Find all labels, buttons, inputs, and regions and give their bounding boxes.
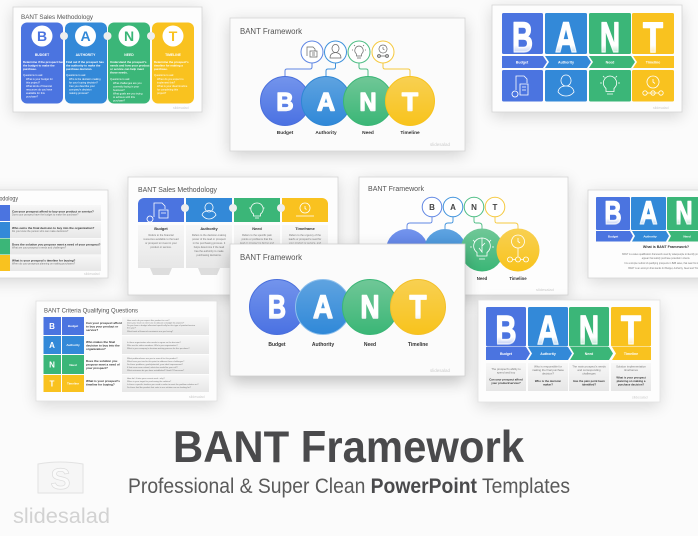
slide: BANT Sales Methodology icon columns: Timeframe <box>295 226 316 231</box>
slide: methodology question rows (cropped at left): Does your prospect have the budget to make the purchase? <box>12 214 79 216</box>
slide: BANT tiles with question cards: your product/service? <box>491 381 521 385</box>
slide: BANT Framework front slide: B <box>268 289 286 325</box>
slide: BANT Sales Methodology columns: slidesalad <box>173 106 189 110</box>
slide: BANT Sales Methodology icon columns: helps determine if the lead <box>194 245 225 249</box>
slide: BANT Framework front slide: Timeline <box>408 342 428 348</box>
slide: BANT Framework front slide: A <box>313 289 333 325</box>
slide: BANT Sales Methodology columns: project? <box>157 91 167 95</box>
slide: BANT Sales Methodology icon columns: Refers to the urgency of the <box>289 233 322 237</box>
slide: BANT Framework letter circles: T <box>493 203 498 212</box>
slide: BANT Sales Methodology columns: Determine if the prospect has <box>23 60 64 64</box>
slide: BANT Sales Methodology icon columns: Refers to the financial <box>148 233 174 237</box>
slide: BANT Criteria Qualifying Questions: How do I fit into your current work - why? <box>127 377 165 380</box>
slide: BANT Sales Methodology columns: business? <box>113 88 125 92</box>
slide: BANT tiles with icons: Timeline <box>646 60 660 64</box>
slide: BANT Framework front slide: T <box>410 289 427 325</box>
slide: BANT Sales Methodology icon columns: Refers to the specific pain <box>242 233 272 237</box>
slide: BANT tiles with icons <box>492 5 682 116</box>
slide: What is BANT Framework (cropped at right): Budget <box>608 234 618 238</box>
slide: BANT Framework letter circles: N <box>471 203 477 212</box>
slide: methodology question rows (cropped at left): Who owns the final decision to buy into the organization? <box>12 226 94 230</box>
slide: BANT Sales Methodology columns: NEED <box>124 53 134 57</box>
slide: BANT Framework with icon circles <box>230 18 465 155</box>
slide: BANT Sales Methodology columns: What is your ideal timeline <box>157 84 188 88</box>
slide: BANT Sales Methodology columns: resources do you have <box>26 88 53 92</box>
slide: BANT Framework letter circles <box>359 177 568 299</box>
slide: BANT Sales Methodology columns: currently facing in your <box>113 84 139 88</box>
slide: BANT Sales Methodology columns: Questions to ask: <box>66 73 86 77</box>
slide: BANT Sales Methodology columns: making process? <box>69 91 89 95</box>
slide: BANT Criteria Qualifying Questions: service? <box>86 328 98 332</box>
slide: BANT Criteria Qualifying Questions: Do you have a budget allocated specifically for this type of product/service <box>127 324 196 327</box>
slide: BANT tiles with question cards: spend and buy <box>497 370 516 374</box>
slide: BANT tiles with question cards: T <box>621 307 641 353</box>
slide: BANT Sales Methodology icon columns: power of the lead or prospect <box>192 237 226 241</box>
slide: BANT Framework front slide: slidesalad <box>430 368 451 373</box>
slide: BANT Sales Methodology columns: purchase decision. <box>66 67 92 71</box>
slide: BANT Criteria Qualifying Questions: slidesalad <box>189 395 205 399</box>
slide: BANT Criteria Qualifying Questions: BANT Criteria Qualifying Questions <box>44 308 138 314</box>
slide: BANT Criteria Qualifying Questions: In these organization who needs to agree on the decision? <box>127 341 182 344</box>
slide: BANT Sales Methodology columns: B <box>37 28 47 44</box>
slide: BANT tiles with question cards: maker? <box>543 382 553 386</box>
slide: BANT Criteria Qualifying Questions: Does your team or client use to allocate a budget for projects? <box>127 322 185 324</box>
slide: BANT Sales Methodology icon columns: lead's or prospect's need for <box>289 237 321 241</box>
slide: BANT tiles with question cards: Budget <box>500 352 513 356</box>
slide: BANT Criteria Qualifying Questions: What is your prospect's <box>86 379 120 383</box>
slide: BANT tiles with question cards <box>478 300 660 406</box>
slide: BANT Sales Methodology icon columns: points or problems that the <box>242 237 273 241</box>
slide: BANT Sales Methodology icon columns: Budget <box>154 226 168 231</box>
slide: BANT Criteria Qualifying Questions: Need <box>69 363 77 367</box>
slide: BANT Framework with icon circles: A <box>317 88 335 116</box>
slide: BANT Sales Methodology columns: needs and how your product <box>110 64 150 68</box>
slide: BANT Sales Methodology columns: Find out if the prospect has <box>66 60 104 64</box>
slide: BANT Sales Methodology columns: for completing this <box>157 88 179 92</box>
slide: What is BANT Framework (cropped at right): B <box>604 195 622 231</box>
slide: BANT Framework with icon circles: Need <box>362 130 374 136</box>
slide: BANT Criteria Qualifying Questions: Do these problems, goals/potential, your ideal improvement? <box>127 363 184 366</box>
slide: BANT tiles with question cards: The main prospect's needs <box>572 364 606 368</box>
slide: BANT tiles with icons: Budget <box>516 60 529 64</box>
slide: BANT Sales Methodology icon columns: Need <box>252 226 262 231</box>
slide: BANT Sales Methodology columns: Questions to ask: <box>110 77 130 81</box>
slide: BANT Sales Methodology columns: Questions to ask: <box>154 73 174 77</box>
slide: BANT Criteria Qualifying Questions: N <box>49 360 55 370</box>
slide: BANT Sales Methodology icon columns: resources available to the lead <box>143 237 179 241</box>
slide: BANT Sales Methodology columns: purchase. <box>154 67 168 71</box>
slide: BANT tiles with question cards: B <box>496 307 516 353</box>
slide: BANT tiles with question cards: Who is the decision <box>535 379 561 383</box>
slide: BANT Criteria Qualifying Questions: T <box>50 380 55 388</box>
slide: BANT Sales Methodology columns: What is your budget for <box>26 77 53 81</box>
slide: BANT Sales Methodology columns: the budget to make the <box>23 64 55 68</box>
slide: BANT Criteria Qualifying Questions: organization? <box>86 347 106 351</box>
slide: BANT Sales Methodology icon columns: lead or prospect is facing and <box>240 241 274 245</box>
slide: What is BANT Framework (cropped at right): Authority <box>643 234 657 238</box>
slide: BANT Framework with icon circles: slidesalad <box>430 142 451 147</box>
slide: BANT Sales Methodology columns: for your buying decision? <box>69 80 98 84</box>
slide: BANT Framework letter circles: A <box>450 203 456 212</box>
slide: What is BANT Framework (cropped at right): A <box>640 195 658 231</box>
slide: What is BANT Framework (cropped at right): appear that satisfy purchase potential in clients. <box>642 257 691 260</box>
slide: BANT Criteria Qualifying Questions: What kinds of financial constraints are you facing? <box>127 330 174 333</box>
slide: BANT Criteria Qualifying Questions: When is your target for purchasing the solution? <box>127 380 172 383</box>
slide: BANT tiles with icons: Need <box>606 60 614 64</box>
slide: methodology question rows (cropped at left) <box>0 190 108 282</box>
slide: BANT Sales Methodology columns: purchase? <box>26 94 39 98</box>
slide: BANT Criteria Qualifying Questions: What have you tried to this point to address these challenges? <box>127 360 185 363</box>
slide: BANT Criteria Qualifying Questions: What problem/issue are you to search for this product? <box>127 357 178 360</box>
slide: BANT tiles with icons: A <box>555 14 577 62</box>
slide: BANT tiles with question cards: Timeline <box>624 352 638 356</box>
slide: BANT Sales Methodology columns: A <box>80 28 91 44</box>
slide: BANT Sales Methodology columns: BUDGET <box>35 53 50 57</box>
connectors <box>285 63 410 78</box>
slide: BANT Sales Methodology columns: available for this <box>26 91 45 95</box>
slide: BANT Sales Methodology columns: When do you expect to <box>157 77 184 81</box>
slide: BANT Sales Methodology columns: Determine the prospect's <box>154 60 189 64</box>
slide: BANT tiles with icons: B <box>512 14 533 62</box>
slide: BANT tiles with question cards: identified? <box>582 382 596 386</box>
slide: BANT tiles with question cards: challenges <box>582 372 596 376</box>
subtitle: Professional & Super Clean PowerPoint Templates <box>128 475 570 498</box>
slide: BANT Framework front slide: N <box>360 289 380 325</box>
slide: BANT Sales Methodology columns: to achieve with this <box>113 95 136 99</box>
slide: What is BANT Framework (cropped at right) <box>588 190 698 282</box>
slide: BANT Criteria Qualifying Questions: Does the solution you <box>86 359 118 363</box>
slide: BANT Criteria Qualifying Questions: Is there a specific timeline you need in order to meet the problem solution on? <box>127 383 199 386</box>
slide: BANT Sales Methodology icon columns: has the authority to make <box>194 249 224 253</box>
slide: BANT Sales Methodology columns: T <box>169 28 178 44</box>
slide: BANT Sales Methodology icon columns: in the purchasing process. It <box>193 241 225 245</box>
slide: BANT Framework letter circles: slidesalad <box>536 287 554 292</box>
slide: BANT Sales Methodology icon columns: BANT Sales Methodology <box>138 187 217 194</box>
slide: BANT tiles with question cards: slidesalad <box>632 396 648 400</box>
slide: What is BANT Framework (cropped at right): N <box>676 195 692 231</box>
slide: BANT Sales Methodology columns: Understand the prospect's <box>110 60 147 64</box>
slide: methodology question rows (cropped at left): Can your prospect afford to buy your product or service? <box>12 210 94 214</box>
slide: BANT Criteria Qualifying Questions: Can your prospect afford <box>86 321 122 325</box>
slide: BANT Sales Methodology icon columns: Authority <box>200 226 218 231</box>
slide: BANT Framework with icon circles: B <box>276 88 294 116</box>
slide: BANT Criteria Qualifying Questions: How much do you expect this product to cost? <box>127 319 170 322</box>
slide: BANT Framework front slide: Budget <box>268 342 286 348</box>
slide: BANT tiles with question cards: timeframes <box>624 368 639 372</box>
slide: BANT tiles with question cards: What is your prospect <box>616 376 646 380</box>
slide: BANT Sales Methodology columns: Questions to ask: <box>23 73 43 77</box>
slide: methodology question rows (cropped at left): Do you know the person who can make decisions? <box>12 230 69 233</box>
slide: BANT Criteria Qualifying Questions: A <box>49 341 55 350</box>
slide: BANT tiles with question cards: Authority <box>540 352 556 356</box>
slide: BANT Criteria Qualifying Questions: If that issue were solved, what else would be your call? <box>127 366 178 369</box>
slide: BANT Framework letter circles: Timeline <box>509 276 527 281</box>
slide: methodology question rows (cropped at left): slidesalad <box>84 272 100 276</box>
slide: BANT Framework front slide: Authority <box>312 342 334 348</box>
slide: BANT tiles with question cards: purchase decision? <box>618 382 644 386</box>
big circles <box>260 76 310 126</box>
logo: slidesalad: slidesalad <box>13 504 110 528</box>
slide: BANT Criteria Qualifying Questions: Timeline <box>67 382 79 386</box>
slide: BANT Sales Methodology icon columns: your product or service, and <box>289 241 322 245</box>
slide: BANT Criteria Qualifying Questions: Do these find the product that suits to our solution we are looking for? <box>127 386 192 389</box>
slide: BANT tiles with icons: N <box>600 14 620 62</box>
slide: BANT Sales Methodology icon columns: product or service. <box>150 245 172 249</box>
slide: BANT Framework front slide: Need <box>364 342 376 348</box>
slide: BANT tiles with question cards: making the final purchase <box>532 368 564 372</box>
logo: slidesalad: S <box>50 463 71 496</box>
slide: BANT Criteria Qualifying Questions: What is your company's decision-making process for this purchase? <box>127 347 190 350</box>
slide: BANT tiles with question cards: Who is responsible for <box>534 364 562 368</box>
slide: BANT tiles with question cards: A <box>537 307 559 353</box>
slide: BANT Sales Methodology columns: What challenges are you <box>113 81 142 85</box>
slide: BANT Criteria Qualifying Questions: Who are the stake members. Who's your organization? <box>127 344 178 347</box>
slide: BANT Sales Methodology columns: purchase? <box>113 98 126 102</box>
slide: BANT Sales Methodology columns: Who is the decision making <box>69 77 101 81</box>
slide: BANT Sales Methodology columns: or service can help meet <box>110 67 144 71</box>
slide: BANT Sales Methodology columns: purchase. <box>23 67 37 71</box>
slide: BANT Criteria Qualifying Questions: Who makes the final <box>86 340 115 344</box>
slide: BANT tiles with question cards: and corresponding <box>577 368 601 372</box>
slide: BANT Criteria Qualifying Questions: your prospect? <box>86 366 108 370</box>
slide: BANT Sales Methodology icon columns <box>128 177 338 299</box>
slide: methodology question rows (cropped at left): What is your prospect's timeline for buying? <box>12 258 76 262</box>
slide: methodology question rows (cropped at left): When do your prospects planning on making purchases? <box>12 262 76 266</box>
slide: BANT Sales Methodology columns: company's decision <box>69 88 92 92</box>
slide: BANT Sales Methodology icon columns: Refers to the decision-making <box>192 233 227 237</box>
slide: BANT Sales Methodology columns: Can you describe your <box>69 84 95 88</box>
slide: BANT Criteria Qualifying Questions: to buy your product or <box>86 324 119 328</box>
slide: BANT Sales Methodology columns: What goals are you trying <box>113 92 143 96</box>
slide: BANT Sales Methodology columns: the authority to make the <box>66 64 101 68</box>
slide: BANT tiles with question cards: Has the pain point been <box>573 379 605 383</box>
slide: What is BANT Framework (cropped at right): What is BANT Framework? <box>643 245 689 249</box>
slide: BANT tiles with icons: slidesalad <box>653 106 669 110</box>
slide: BANT Sales Methodology columns: implement this? <box>157 80 176 84</box>
slide: BANT tiles with question cards: decision? <box>542 372 554 376</box>
slide: BANT Framework with icon circles: N <box>360 88 376 116</box>
slide: BANT Framework with icon circles: Timeline <box>400 130 420 136</box>
slide: BANT Criteria Qualifying Questions: propose meet a need of <box>86 362 120 366</box>
slide: BANT tiles with icons: Authority <box>558 60 574 64</box>
slide: BANT Criteria Qualifying Questions: Authority <box>66 343 80 347</box>
slide: BANT Framework letter circles: B <box>429 203 435 212</box>
slide: BANT Criteria Qualifying Questions: What outcomes do you have established? Goals? Processes? <box>127 369 185 372</box>
title: BANT Framework <box>173 423 524 472</box>
slide: BANT Criteria Qualifying Questions <box>36 301 217 405</box>
slide: BANT Sales Methodology icon columns: or prospect to invest in your <box>145 241 177 245</box>
slide: BANT Sales Methodology columns: timeline for making a <box>154 64 183 68</box>
slide: BANT Framework front slide: BANT Framework <box>240 253 303 262</box>
slide: BANT Sales Methodology columns: this project? <box>26 80 41 84</box>
slide: BANT Criteria Qualifying Questions: B <box>49 322 55 331</box>
slide: methodology question rows (cropped at left): Does the solution you propose meet a need of your prospect? <box>12 242 101 246</box>
slide: BANT Framework letter circles: Need <box>477 276 488 281</box>
slide: BANT tiles with question cards: Solution implementation <box>616 364 646 368</box>
slide: BANT Framework letter circles: BANT Framework <box>368 186 424 193</box>
slide: BANT Sales Methodology columns: What kinds of financial <box>26 84 52 88</box>
slide: BANT Framework with icon circles: BANT Framework <box>240 27 303 36</box>
slide: BANT Criteria Qualifying Questions: decision to buy into the <box>86 344 120 348</box>
slide: methodology question rows (cropped at left): What are your prospect's needs and challenges? <box>12 246 67 250</box>
slide: BANT Criteria Qualifying Questions: this year? <box>127 326 137 330</box>
slide: What is BANT Framework (cropped at right): Need <box>683 234 691 238</box>
slide: BANT Criteria Qualifying Questions: Budget <box>68 324 78 328</box>
slide: BANT Framework with icon circles: Authority <box>315 130 337 136</box>
slide: BANT tiles with question cards: Can your prospect afford <box>489 378 523 382</box>
slide: BANT Framework with icon circles: T <box>402 88 418 116</box>
slide: BANT Sales Methodology columns <box>13 7 202 115</box>
slide: BANT Framework front slide <box>230 244 465 382</box>
slide: BANT Sales Methodology icon columns: purchasing decisions. <box>197 253 222 257</box>
slide: BANT Sales Methodology columns: TIMELINE <box>165 53 182 57</box>
slide: BANT Sales Methodology columns: BANT Sales Methodology <box>21 14 94 21</box>
slide: BANT tiles with question cards: N <box>579 307 599 353</box>
slide: BANT Sales Methodology columns: those needs. <box>110 70 128 74</box>
slide: BANT Sales Methodology columns: N <box>124 28 134 44</box>
slide: BANT Sales Methodology columns: AUTHORITY <box>76 53 96 57</box>
slide: BANT Framework with icon circles: Budget <box>277 130 294 136</box>
slide: BANT tiles with icons: T <box>643 14 663 62</box>
logo: slidesalad <box>13 462 110 528</box>
slide: BANT tiles with question cards: planning on making a <box>617 379 646 383</box>
slide: BANT tiles with question cards: The prospect's ability to <box>491 367 521 371</box>
slide: BANT tiles with question cards: Need <box>585 352 593 356</box>
slide: BANT Criteria Qualifying Questions: timeline for buying? <box>86 382 115 386</box>
